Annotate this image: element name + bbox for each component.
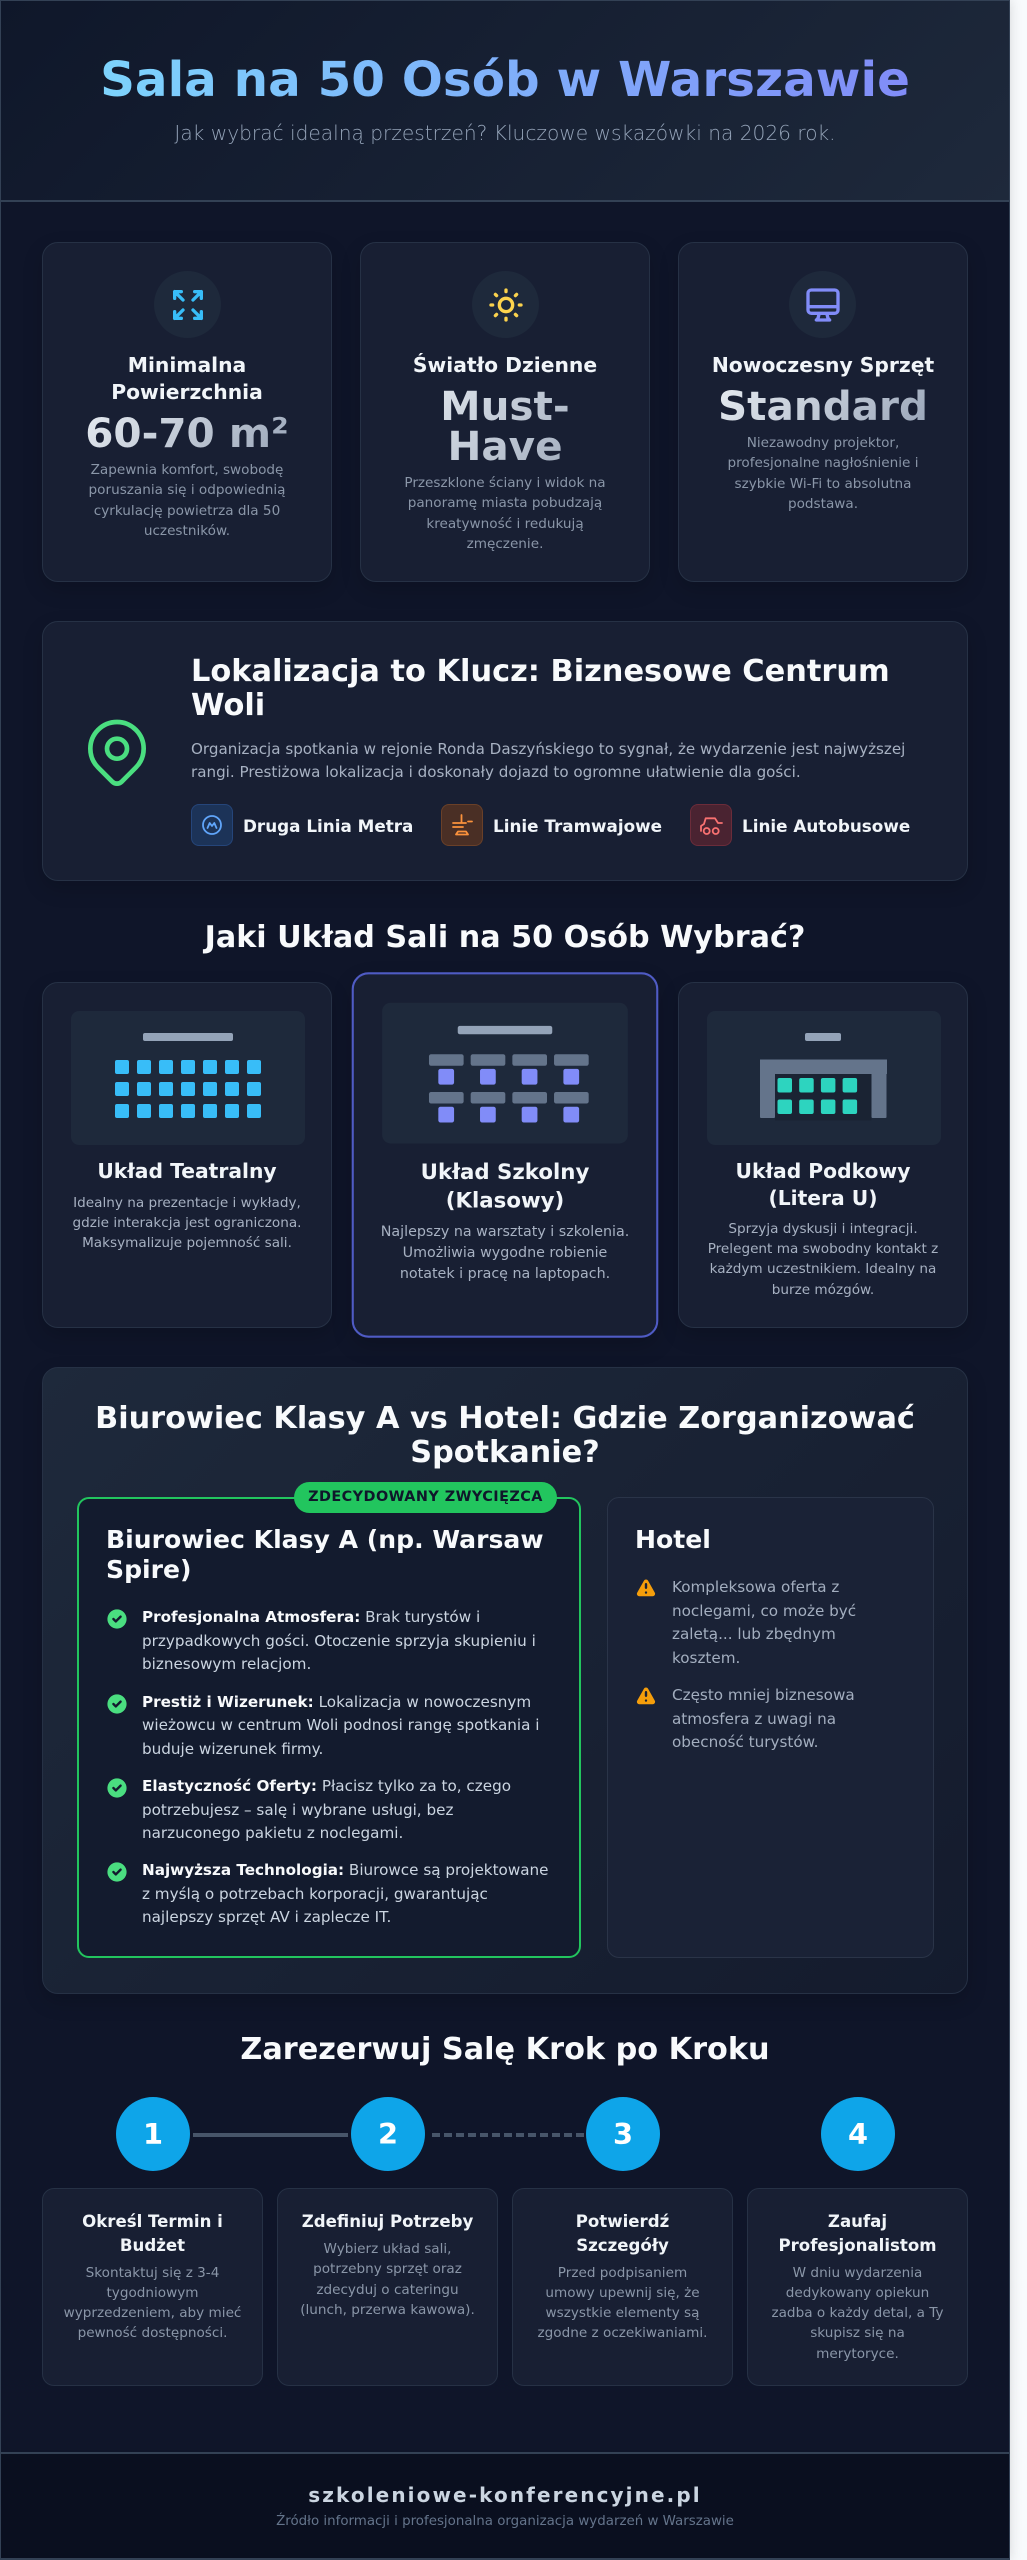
heading: booking steps: Zarezerwuj Salę Krok po Kroku xyxy=(240,2032,770,2067)
label: tram: Linie Tramwajowe xyxy=(493,816,662,836)
option: Class A office, winner xyxy=(77,1497,581,1958)
description: Niezawodny projektor, xyxy=(747,435,899,451)
icon: check xyxy=(107,1694,127,1714)
benefit 4 xyxy=(107,1861,549,1926)
step number 2 xyxy=(351,2097,425,2171)
text xyxy=(142,1608,536,1673)
description: każdym uczestnikiem. Idealny na xyxy=(710,1261,936,1277)
description: Umożliwia wygodne robienie xyxy=(403,1244,607,1261)
description xyxy=(404,475,606,552)
description: Sprzyja dyskusji i integracji. xyxy=(728,1221,918,1237)
stat value: Must- xyxy=(440,382,570,430)
step card 1 xyxy=(42,2188,263,2386)
description: profesjonalne nagłośnienie i xyxy=(727,455,919,471)
text: potrzebujesz – salę i wybrane usługi, bez xyxy=(142,1801,453,1819)
title: Określ Termin i xyxy=(82,2212,223,2231)
heading: Biurowiec Klasy A vs Hotel: Gdzie Zorganizować xyxy=(95,1401,915,1436)
heading xyxy=(191,654,890,723)
icon: sun xyxy=(472,271,539,338)
icon: check xyxy=(107,1778,127,1798)
text xyxy=(672,1686,855,1751)
panel: modern equipment xyxy=(678,242,968,582)
description xyxy=(300,2241,475,2318)
description: Idealny na prezentacje i wykłady, xyxy=(73,1195,301,1211)
drawback 2 xyxy=(636,1686,855,1751)
benefit 3 xyxy=(107,1777,511,1842)
description: wyprzedzeniem, aby mieć xyxy=(64,2305,241,2321)
text xyxy=(142,1777,511,1842)
heading xyxy=(95,1401,915,1470)
footer xyxy=(0,2452,1010,2560)
description xyxy=(538,2264,707,2341)
description: szybkie Wi-Fi to absolutna xyxy=(734,476,911,492)
description xyxy=(771,2264,944,2362)
description: tygodniowym xyxy=(106,2285,199,2301)
text: kosztem. xyxy=(672,1649,740,1667)
text: biznesowym relacjom. xyxy=(142,1655,311,1673)
benefit 1 xyxy=(107,1608,536,1673)
heading: Spire) xyxy=(106,1555,192,1584)
stat value: 60-70 m² xyxy=(85,409,289,457)
description: potrzebny sprzęt oraz xyxy=(313,2261,462,2277)
subtitle: Jak wybrać idealną przestrzeń? Kluczowe wskazówki na 2026 rok. xyxy=(174,121,836,145)
step card 4 xyxy=(747,2188,968,2386)
main title: Sala na 50 Osób w Warszawie xyxy=(100,52,910,108)
stat value xyxy=(361,386,649,466)
description: W dniu wydarzenia xyxy=(793,2264,922,2280)
heading: Spotkanie? xyxy=(410,1435,600,1470)
title xyxy=(576,2212,669,2255)
step card 3 xyxy=(512,2188,733,2386)
connector: step 1 to 2 xyxy=(193,2133,348,2137)
title: Profesjonalistom xyxy=(778,2236,937,2255)
title: Potwierdź xyxy=(576,2212,669,2231)
header band xyxy=(0,0,1010,202)
text: noclegami, co może być xyxy=(672,1602,856,1620)
description: merytoryce. xyxy=(816,2346,899,2362)
text: narzuconego pakietu z noclegami. xyxy=(142,1824,403,1842)
description: uczestników. xyxy=(144,523,230,539)
panel: theatre layout xyxy=(42,982,332,1328)
panel: location xyxy=(42,621,968,881)
description: Przeszklone ściany i widok na xyxy=(404,475,606,491)
heading: Hotel xyxy=(635,1525,711,1554)
description: panoramę miasta pobudzają xyxy=(408,495,602,511)
description: Przed podpisaniem xyxy=(558,2264,687,2280)
description: kreatywność i redukują xyxy=(426,516,584,532)
icon: tram xyxy=(441,804,483,846)
heading xyxy=(111,353,263,404)
heading xyxy=(736,1159,910,1210)
stat value xyxy=(679,386,967,426)
drawback 1 xyxy=(636,1578,856,1667)
description: Wybierz układ sali, xyxy=(324,2241,451,2257)
text xyxy=(142,1861,549,1926)
step number 3 xyxy=(586,2097,660,2171)
label: metro: Druga Linia Metra xyxy=(243,816,413,836)
text: Profesjonalna Atmosfera: Brak turystów i xyxy=(142,1608,480,1626)
description: skupisz się na xyxy=(810,2325,905,2341)
text: obecność turystów. xyxy=(672,1733,818,1751)
description: umowy upewnij się, że xyxy=(545,2285,700,2301)
description: burze mózgów. xyxy=(772,1282,874,1298)
benefit 2 xyxy=(107,1692,539,1758)
text: z myślą o potrzebach korporacji, gwarantując xyxy=(142,1885,488,1903)
badge: winner: ZDECYDOWANY ZWYCIĘZCA xyxy=(308,1489,543,1505)
description xyxy=(89,462,285,539)
heading: room layouts: Jaki Układ Sali na 50 Osób Wybrać? xyxy=(205,920,805,955)
badge: winner xyxy=(294,1482,557,1513)
panel: minimum area xyxy=(42,242,332,582)
step number 3: 3 xyxy=(613,2117,633,2151)
connector: step 2 to 3 xyxy=(432,2133,584,2137)
text: buduje wizerunek firmy. xyxy=(142,1740,323,1758)
description: (lunch, przerwa kawowa). xyxy=(300,2302,475,2318)
icon: bus xyxy=(690,804,732,846)
description: zadba o każdy detal, a Ty xyxy=(771,2305,944,2321)
description: wszystkie elementy są xyxy=(546,2305,699,2321)
heading: Lokalizacja to Klucz: Biznesowe Centrum xyxy=(191,654,890,689)
title: Zaufaj xyxy=(828,2212,887,2231)
title: Zdefiniuj Potrzeby xyxy=(302,2212,473,2231)
heading: Powierzchnia xyxy=(111,380,263,404)
description: cyrkulację powietrza dla 50 xyxy=(94,503,280,519)
panel: office vs hotel comparison xyxy=(42,1367,968,1994)
heading: Układ Szkolny xyxy=(421,1159,589,1184)
description: gdzie interakcja jest ograniczona. xyxy=(73,1215,301,1231)
option: hotel xyxy=(607,1497,934,1958)
label: bus: Linie Autobusowe xyxy=(742,816,910,836)
stat value: Standard xyxy=(718,382,928,430)
description: Organizacja spotkania w rejonie Ronda Daszyńskiego to sygnał, że wydarzenie jest najwyższej xyxy=(191,740,905,758)
icon: expand arrows xyxy=(154,271,221,338)
description: zmęczenie. xyxy=(467,536,543,552)
description: Skontaktuj się z 3-4 xyxy=(86,2264,219,2280)
text xyxy=(142,1692,539,1758)
icon: check xyxy=(107,1862,127,1882)
description: Najlepszy na warsztaty i szkolenia. xyxy=(381,1223,629,1240)
stat value: Have xyxy=(447,422,563,470)
panel: daylight xyxy=(360,242,650,582)
description: rangi. Prestiżowa lokalizacja i doskonały dojazd to ogromne ułatwienie dla gości. xyxy=(191,763,801,781)
text: Prestiż i Wizerunek: Lokalizacja w nowoczesnym xyxy=(142,1692,531,1710)
description xyxy=(381,1223,629,1282)
icon: metro xyxy=(191,804,233,846)
description xyxy=(191,740,905,781)
step number 2: 2 xyxy=(378,2117,398,2151)
diagram: U-shape seating xyxy=(707,1011,941,1145)
panel: classroom layout, highlighted xyxy=(352,972,658,1338)
title: Budżet xyxy=(120,2236,185,2255)
description: dedykowany opiekun xyxy=(786,2285,929,2301)
heading xyxy=(106,1525,544,1584)
description: poruszania się i odpowiednią xyxy=(89,482,285,498)
description: pewność dostępności. xyxy=(78,2325,227,2341)
icon: warning xyxy=(636,1688,656,1704)
heading: Światło Dzienne xyxy=(413,353,597,377)
heading xyxy=(421,1159,589,1213)
heading: Minimalna xyxy=(128,353,246,377)
heading: Woli xyxy=(191,688,265,723)
description: Maksymalizuje pojemność sali. xyxy=(82,1235,292,1251)
icon: check xyxy=(107,1609,127,1629)
diagram: theatre seating xyxy=(71,1011,305,1145)
description: zgodne z oczekiwaniami. xyxy=(538,2325,707,2341)
text: Najwyższa Technologia: Biurowce są projektowane xyxy=(142,1861,549,1879)
heading: (Klasowy) xyxy=(446,1188,564,1213)
description: notatek i pracę na laptopach. xyxy=(400,1266,610,1282)
heading: Biurowiec Klasy A (np. Warsaw xyxy=(106,1525,544,1554)
text: Kompleksowa oferta z xyxy=(672,1578,839,1596)
text: Często mniej biznesowa xyxy=(672,1686,855,1704)
title xyxy=(82,2212,223,2255)
title xyxy=(778,2212,937,2255)
icon: location pin xyxy=(88,720,146,786)
text: przypadkowych gości. Otoczenie sprzyja skupieniu i xyxy=(142,1632,536,1650)
title: Szczegóły xyxy=(576,2236,669,2255)
description: podstawa. xyxy=(788,496,858,512)
description: Prelegent ma swobodny kontakt z xyxy=(708,1241,938,1257)
heading: Układ Podkowy xyxy=(736,1159,910,1183)
description xyxy=(73,1195,301,1251)
description: zdecyduj o cateringu xyxy=(316,2282,459,2298)
step number 4 xyxy=(821,2097,895,2171)
description xyxy=(727,435,919,512)
text: Elastyczność Oferty: Płacisz tylko za to, czego xyxy=(142,1777,511,1795)
footer note: Źródło informacji i profesjonalna organizacja wydarzeń w Warszawie xyxy=(276,2514,734,2529)
step card 2 xyxy=(277,2188,498,2386)
heading: (Litera U) xyxy=(768,1186,878,1210)
description: Zapewnia komfort, swobodę xyxy=(91,462,283,478)
icon: monitor xyxy=(789,271,856,338)
text: wieżowcu w centrum Woli podnosi rangę spotkania i xyxy=(142,1716,539,1734)
step number 1 xyxy=(116,2097,190,2171)
text xyxy=(672,1578,856,1667)
description xyxy=(708,1221,938,1298)
step number 4: 4 xyxy=(848,2117,868,2151)
panel: U-shape layout xyxy=(678,982,968,1328)
footer website: szkoleniowe-konferencyjne.pl xyxy=(308,2483,702,2507)
text: zaletą... lub zbędnym xyxy=(672,1625,836,1643)
stat value xyxy=(43,413,331,453)
diagram: classroom seating xyxy=(382,1003,628,1143)
text: najlepszy sprzęt AV i zaplecze IT. xyxy=(142,1908,391,1926)
step number 1: 1 xyxy=(143,2117,163,2151)
heading: Układ Teatralny xyxy=(97,1159,277,1183)
heading: Nowoczesny Sprzęt xyxy=(712,353,934,377)
text: atmosfera z uwagi na xyxy=(672,1710,836,1728)
description xyxy=(64,2264,241,2341)
icon: warning xyxy=(636,1580,656,1596)
